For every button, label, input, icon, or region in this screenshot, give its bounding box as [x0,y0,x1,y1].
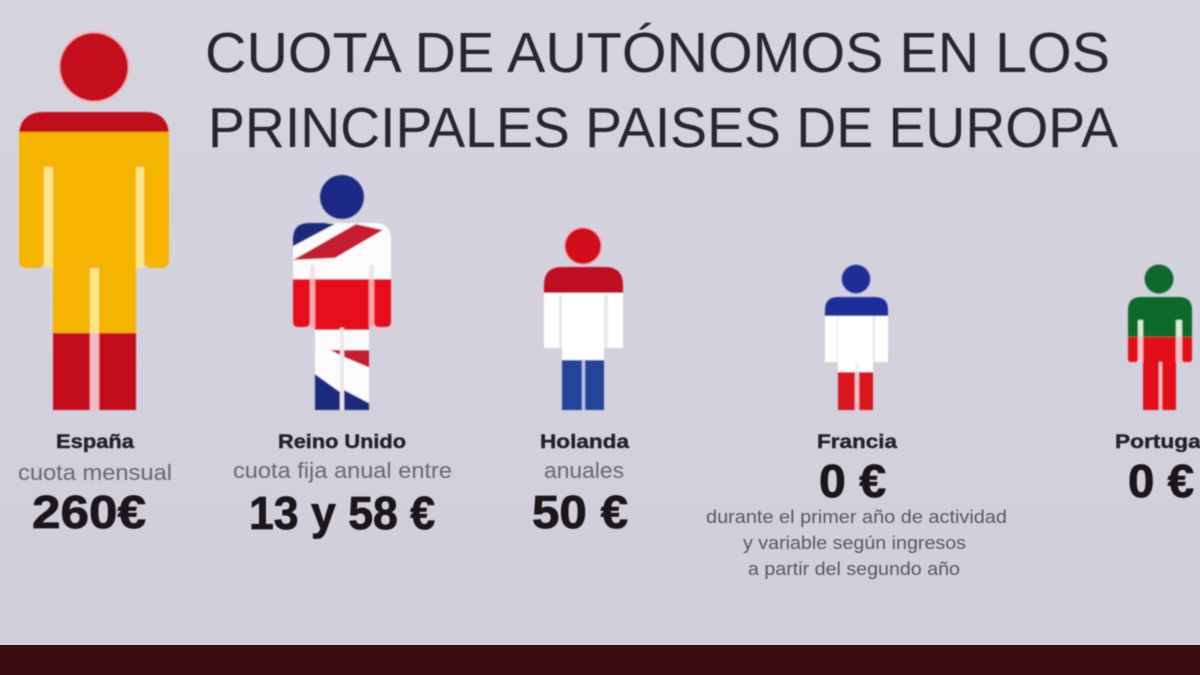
label: Portugal: Portugal [1115,431,1200,453]
label: Francia: y variable según ingresos [743,533,966,553]
figure: Portugal flag person [1124,264,1196,413]
figure: Reino Unido flag person [290,175,394,412]
label: España: cuota mensual [18,460,172,485]
label: Reino Unido [233,431,452,539]
label: España [18,431,172,538]
label: Holanda: anuales [544,458,624,483]
title [205,21,1118,160]
figure: Holanda flag person [543,226,624,411]
label: Reino Unido: 13 y 58 € [249,487,435,539]
label: Francia: Francia [817,431,897,453]
label: Holanda [532,431,629,538]
label: Holanda: Holanda [540,431,629,453]
label: Reino Unido: Reino Unido [278,431,406,453]
title: PRINCIPALES PAISES DE EUROPA [208,96,1118,160]
label: Francia: durante el primer año de actividad [706,507,1007,527]
label: Portugal [1115,431,1200,507]
label: España: 260€ [32,486,146,538]
label: Francia [706,431,1007,579]
label: Francia: a partir del segundo año [748,559,960,579]
title: CUOTA DE AUTÓNOMOS EN LOS [205,21,1110,85]
label: Holanda: 50 € [532,486,628,538]
figure: España flag person [15,31,175,413]
label: Portugal: 0 € [1128,455,1194,507]
label: España: España [56,431,134,453]
bottom dark bar [0,645,1200,675]
figure: Francia flag person [824,264,889,411]
label: Francia: 0 € [819,455,886,507]
label: Reino Unido: cuota fija anual entre [233,458,452,483]
